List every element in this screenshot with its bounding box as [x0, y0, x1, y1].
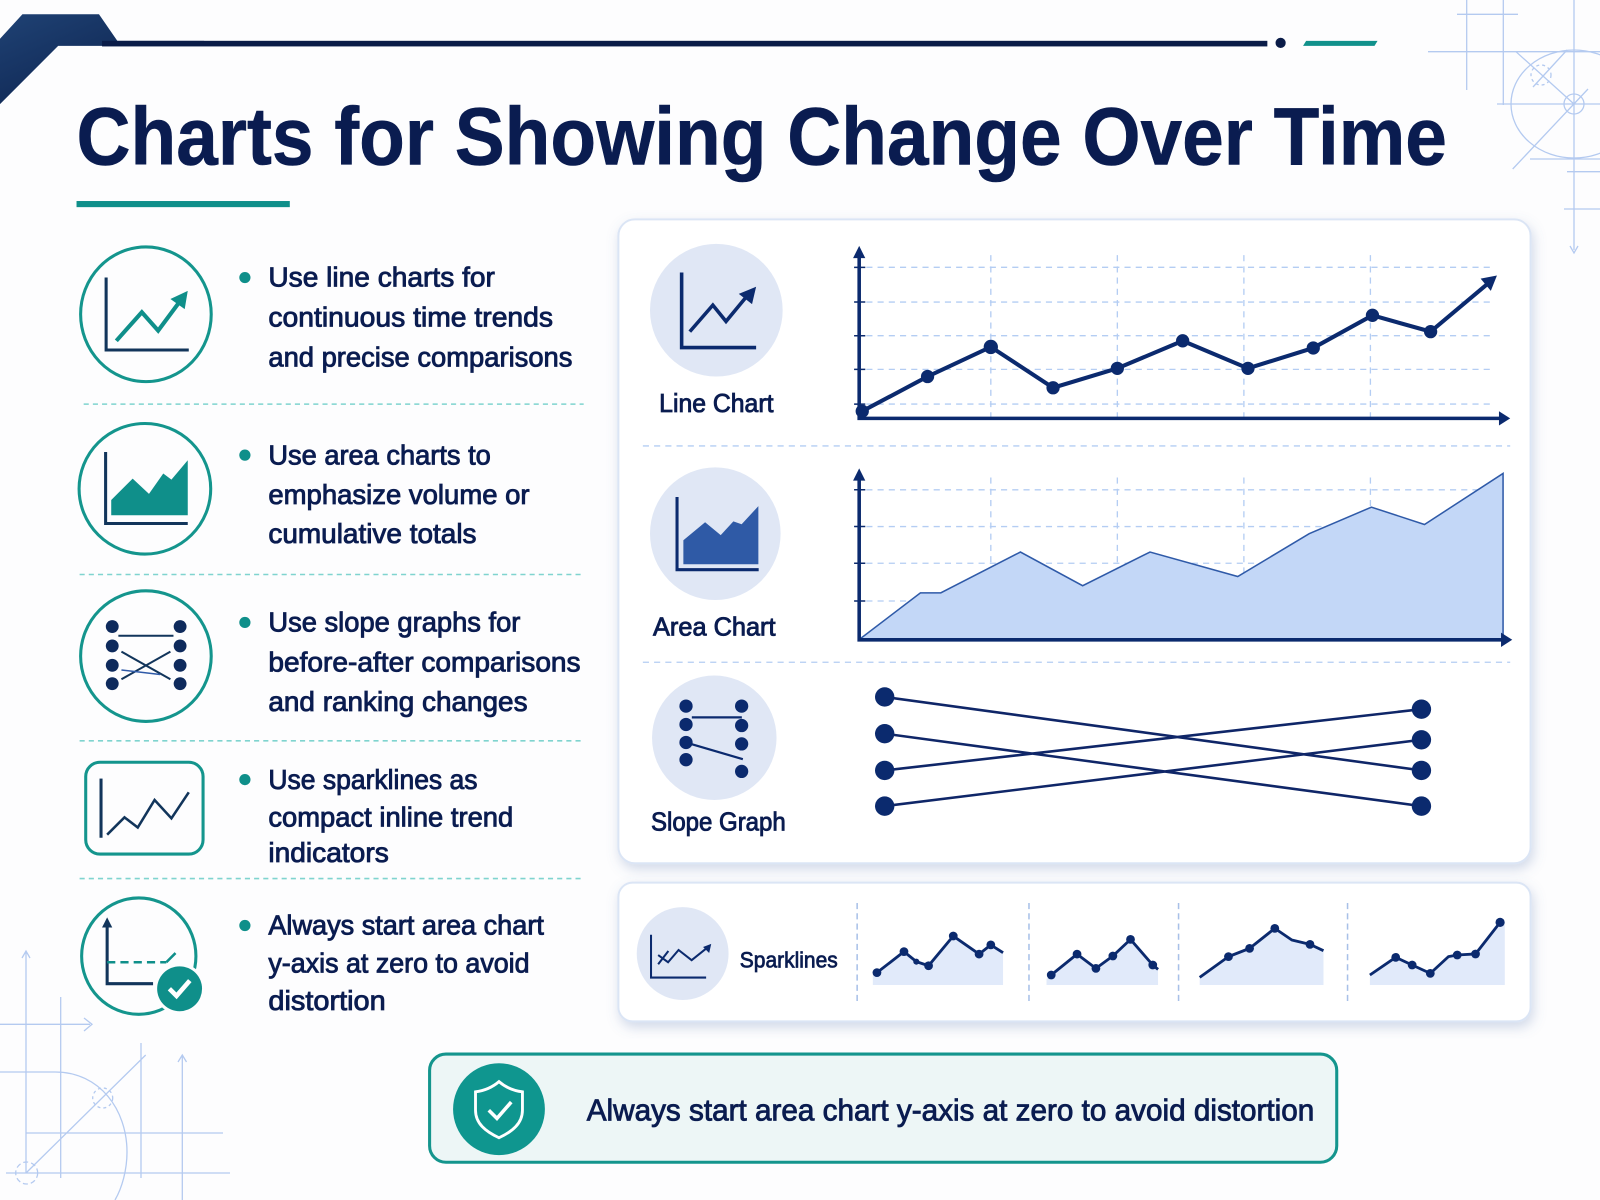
bullet text: line charts — [239, 262, 572, 372]
bullet text: area charts: cumulative totals — [268, 518, 477, 549]
bullet text: slope graphs — [239, 607, 581, 717]
icon: slope graph — [81, 591, 211, 721]
bullet text: sparklines: compact inline trend — [268, 802, 513, 833]
bullet text: area charts: emphasize volume or — [268, 479, 530, 510]
sparkline 4 — [1370, 918, 1505, 985]
panel: guidance list — [79, 247, 584, 1016]
bullet text: zero baseline: distortion — [268, 985, 386, 1016]
sparkline 3 — [1200, 924, 1323, 985]
panel: chart examples — [618, 219, 1531, 863]
title underline — [77, 201, 290, 207]
icon: zero baseline check — [82, 898, 205, 1014]
list item: line charts — [81, 247, 572, 382]
list item: zero baseline — [82, 898, 544, 1016]
icon: slope graph badge — [652, 676, 777, 800]
icon: sparkline — [86, 762, 203, 854]
header bar — [0, 14, 1378, 104]
bullet text: line charts: Use line charts for — [268, 262, 495, 293]
list item: area charts — [79, 423, 530, 554]
bullet text: line charts: continuous time trends — [268, 302, 553, 333]
bullet text: sparklines: indicators — [268, 837, 389, 868]
title: Charts for Showing Change Over Time — [77, 91, 1447, 182]
sparkline 1 — [873, 932, 1003, 985]
bullet text: sparklines: Use sparklines as — [268, 764, 478, 795]
bullet text: zero baseline — [239, 910, 544, 1016]
callout text: Always start area chart y-axis at zero to avoid distortion — [587, 1093, 1314, 1127]
bullet text: line charts: and precise comparisons — [268, 341, 572, 372]
blueprint decoration: bottom left — [0, 951, 230, 1200]
bullet text: slope graphs: Use slope graphs for — [268, 607, 520, 638]
chart: line chart — [853, 246, 1510, 426]
icon: line chart — [81, 247, 211, 382]
bullet text: sparklines — [239, 764, 513, 868]
label: area chart: Area Chart — [653, 614, 776, 642]
callout: zero baseline reminder — [430, 1054, 1337, 1162]
bullet text: slope graphs: before-after comparisons — [268, 646, 581, 677]
icon: shield check — [453, 1063, 545, 1155]
sparkline 2 — [1047, 935, 1158, 985]
list item: slope graphs — [81, 591, 581, 721]
list item: sparklines — [86, 762, 513, 868]
blueprint decoration: top right — [1428, 0, 1600, 253]
icon: sparkline badge — [637, 907, 729, 1000]
label: sparklines: Sparklines — [740, 947, 838, 972]
label: line chart: Line Chart — [659, 390, 773, 418]
icon: line chart badge — [650, 244, 783, 377]
bullet text: zero baseline: Always start area chart — [268, 910, 544, 941]
chart: slope graph — [875, 687, 1431, 816]
chart: area chart — [853, 468, 1512, 647]
bullet text: slope graphs: and ranking changes — [268, 686, 528, 717]
icon: area chart — [79, 423, 211, 554]
label: slope graph: Slope Graph — [651, 809, 786, 837]
bullet text: area charts — [239, 439, 530, 549]
icon: area chart badge — [650, 467, 781, 600]
bullet text: zero baseline: y-axis at zero to avoid — [268, 947, 530, 978]
panel: sparklines — [618, 883, 1531, 1021]
bullet text: area charts: Use area charts to — [268, 439, 491, 470]
